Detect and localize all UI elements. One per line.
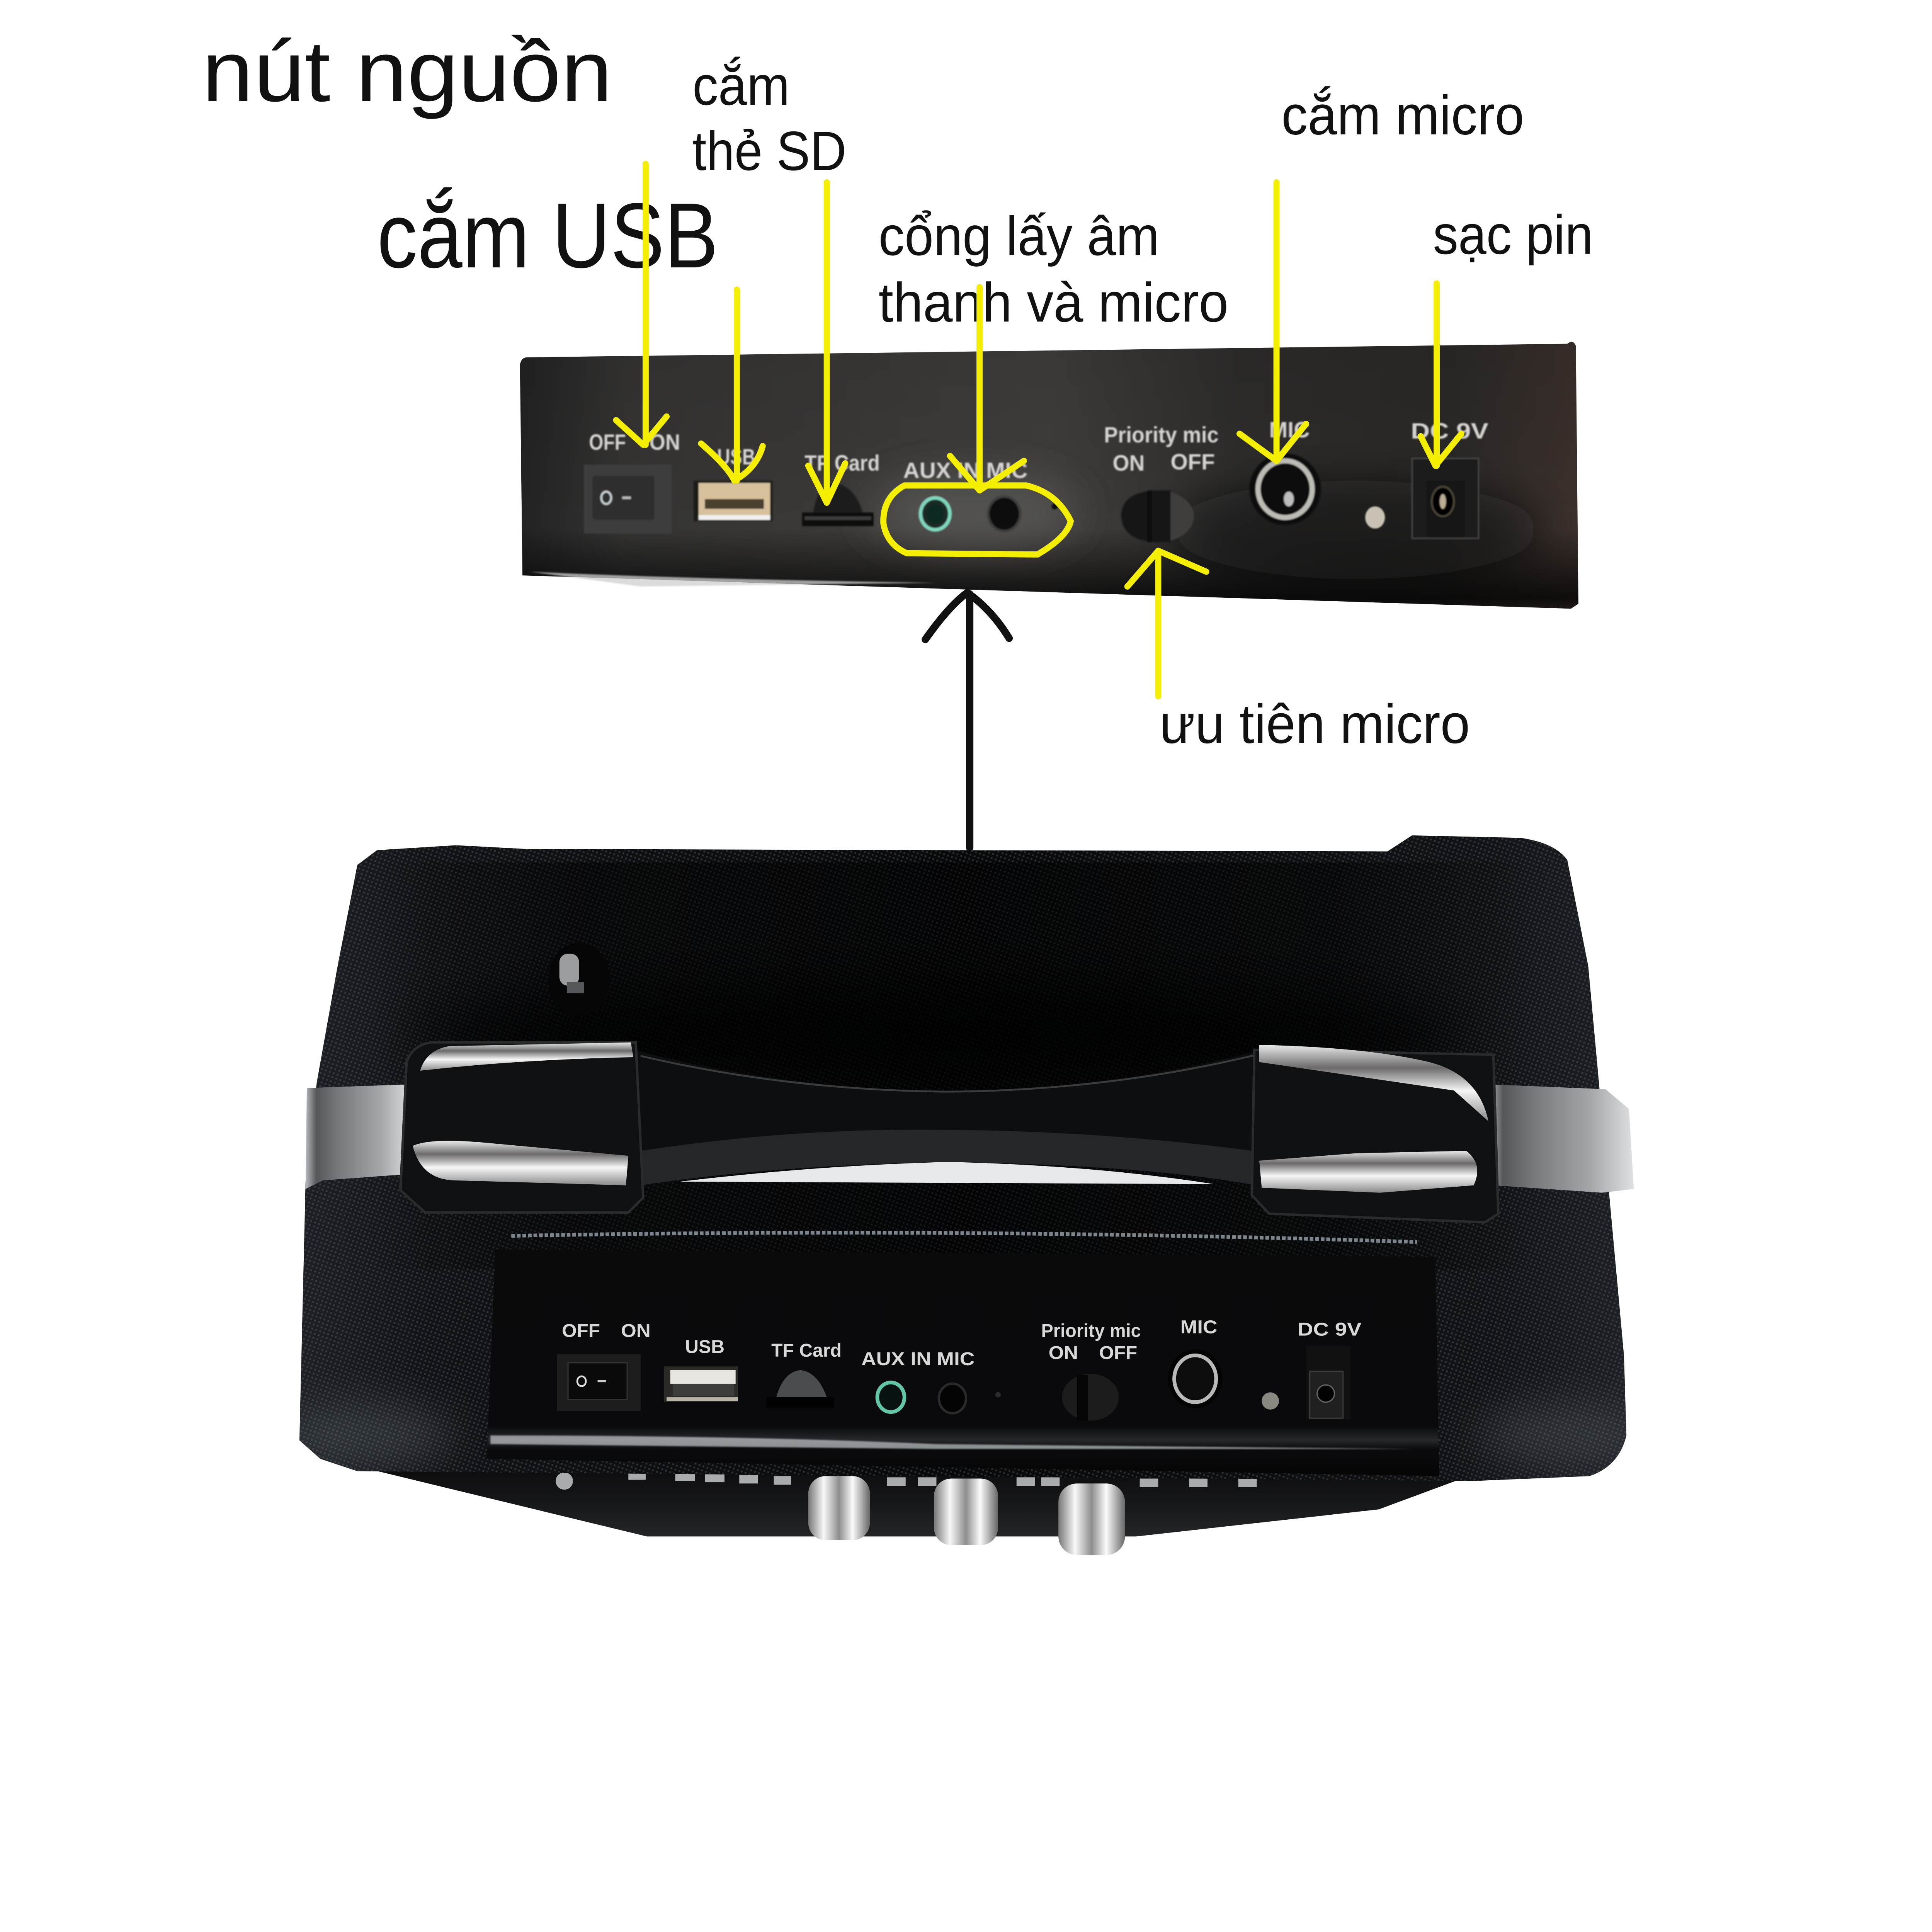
silk-screen labels: ON <box>621 1321 651 1341</box>
callout arrows: yellow pointers to ports <box>616 164 1461 696</box>
arrow: USB <box>701 289 763 481</box>
silk-screen labels on close-up <box>589 418 1488 483</box>
silk-screen labels on close-up: OFF <box>1170 450 1215 474</box>
silk-screen labels: MIC <box>1180 1317 1218 1337</box>
handle bracket right <box>1252 1045 1498 1222</box>
lower underside with knobs <box>357 1466 1479 1555</box>
switch <box>557 1354 641 1411</box>
arrow: power switch <box>616 164 667 445</box>
silk-screen labels on close-up: TF Card <box>804 451 880 476</box>
silk-screen labels on close-up: USB <box>717 445 755 469</box>
priority mic slide knob <box>1121 490 1194 542</box>
TF slot <box>766 1370 834 1408</box>
label: sạc pin: sạc pin <box>1433 204 1593 266</box>
AUX IN jack <box>920 498 950 530</box>
silk-screen labels on close-up: ON <box>1112 451 1145 476</box>
panel: close-up of rear port strip <box>520 342 1578 609</box>
silk-screen labels: TF Card <box>771 1340 842 1361</box>
silk-screen labels: OFF <box>1099 1343 1137 1363</box>
outline around AUX and MIC jacks <box>883 485 1071 554</box>
MIC jack small <box>988 497 1058 531</box>
USB <box>664 1366 738 1402</box>
arrow: AUX and MIC <box>950 287 1024 490</box>
LED indicator <box>1365 507 1385 529</box>
silk-screen labels: Priority mic <box>1041 1321 1141 1341</box>
label: ưu tiên micro: ưu tiên micro <box>1160 693 1470 755</box>
USB port <box>694 481 772 521</box>
silk-screen labels: ON <box>1049 1343 1078 1363</box>
heading: nút nguồn: nút nguồn <box>202 23 612 119</box>
silk-screen labels: OFF <box>562 1321 600 1341</box>
metal band right <box>1488 1084 1634 1193</box>
arrow: priority switch <box>1128 551 1206 696</box>
silk-screen labels: DC 9V <box>1298 1320 1362 1340</box>
heading: cắm USB: cắm USB <box>377 184 718 287</box>
DC jack <box>1306 1345 1350 1419</box>
label: cắm thẻ SD: cắm <box>692 55 790 117</box>
label: cắm micro: cắm micro <box>1281 85 1524 146</box>
DC 9V jack <box>1412 458 1479 538</box>
label: cổng lấy âm thanh và micro: cổng lấy âm <box>879 205 1160 267</box>
handle grip <box>628 1050 1262 1187</box>
silk-screen labels <box>562 1317 1362 1369</box>
silk-screen labels on close-up: AUX IN MIC <box>903 458 1027 483</box>
MIC mini jack <box>939 1384 966 1413</box>
front control panel <box>487 1233 1439 1476</box>
mounting stud <box>548 942 610 1017</box>
label: cắm thẻ SD <box>692 55 847 182</box>
arrow: DC <box>1421 283 1461 466</box>
silk-screen labels on close-up: OFF <box>589 430 626 455</box>
infographic canvas <box>208 35 1634 1555</box>
arrow: MIC <box>1240 182 1306 461</box>
knob <box>1062 1374 1119 1421</box>
silk-screen labels on close-up: DC 9V <box>1411 419 1488 444</box>
AUX jack <box>877 1383 905 1412</box>
silk-screen labels on close-up: ON <box>649 430 680 455</box>
TF card slot <box>802 483 874 526</box>
silk-screen labels on close-up: Priority mic <box>1104 423 1219 447</box>
arrow: black link from speaker to close-up <box>925 593 1009 848</box>
arrow: SD card <box>808 182 845 503</box>
MIC jack <box>1168 1349 1222 1408</box>
label: cổng lấy âm thanh và micro: thanh và micro <box>879 272 1228 333</box>
metal band left <box>306 1084 413 1189</box>
chrome control knobs <box>808 1476 1125 1555</box>
label: cắm thẻ SD: thẻ SD <box>692 120 847 182</box>
MIC 6.35 jack <box>1249 453 1321 525</box>
silk-screen labels on close-up: MIC <box>1269 418 1310 442</box>
speaker body <box>283 835 1645 1555</box>
silk-screen labels: USB <box>685 1337 724 1357</box>
silk-screen labels: AUX IN MIC <box>861 1349 975 1369</box>
LED <box>1262 1392 1279 1410</box>
label: cổng lấy âm thanh và micro <box>879 205 1228 333</box>
pin hole <box>995 1392 1001 1398</box>
rocker switch OFF/ON <box>584 464 672 534</box>
handle bracket left <box>400 1043 643 1213</box>
